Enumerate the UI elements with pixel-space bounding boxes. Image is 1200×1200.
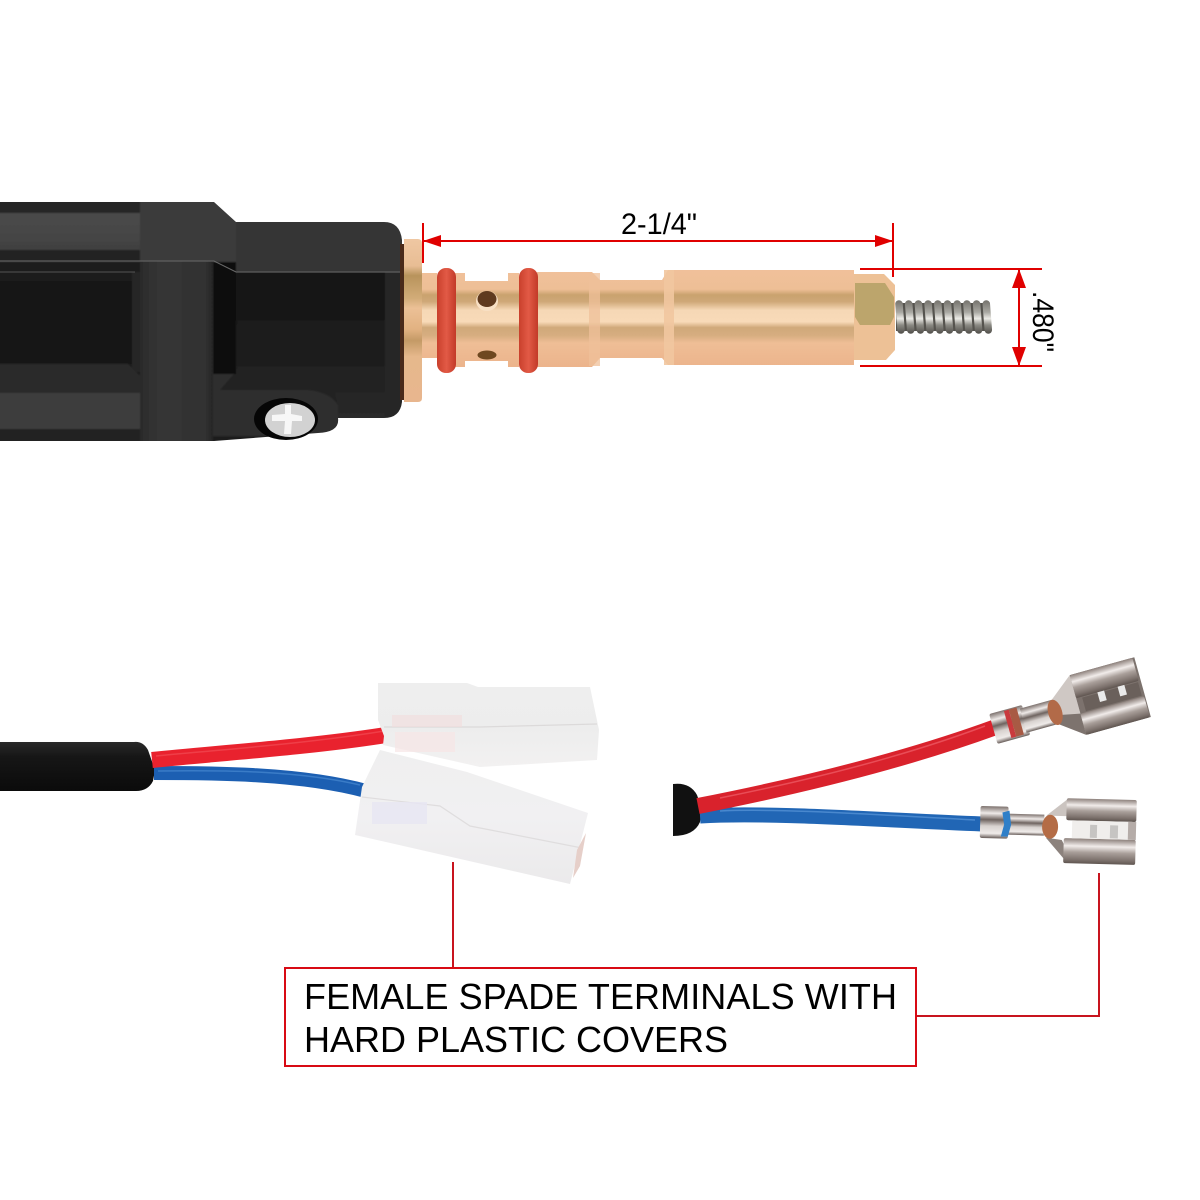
steel spring	[896, 303, 990, 331]
callout: female spade terminals label	[285, 968, 916, 1066]
callout: female spade terminals label: FEMALE SPADE TERMINALS WITH	[304, 976, 897, 1017]
callout: leader lines	[453, 862, 1099, 1016]
panel: wires with plastic-covered terminals	[0, 657, 1151, 884]
red o-ring right	[519, 268, 538, 373]
plastic cover lower	[355, 750, 588, 884]
brass contact tip body	[422, 270, 854, 367]
brass hex nut	[854, 274, 895, 360]
blue wire	[154, 771, 366, 791]
black sleeve end	[673, 784, 701, 836]
red o-ring left	[437, 268, 456, 373]
spade terminal upper	[985, 657, 1151, 758]
red wire right	[698, 726, 996, 806]
hole upper	[476, 291, 498, 311]
dimension: diameter .480 inch	[860, 269, 1059, 366]
black connector handle	[0, 198, 415, 448]
spade terminal lower	[979, 796, 1137, 865]
dimension: diameter .480 inch: .480"	[1026, 291, 1059, 352]
red wire	[152, 731, 386, 760]
plastic cover upper	[378, 683, 599, 767]
hole lower	[478, 350, 496, 360]
brass flange	[404, 239, 422, 402]
flange shadow edge	[400, 244, 404, 400]
callout: female spade terminals label: HARD PLASTIC COVERS	[304, 1019, 728, 1060]
black heat-shrink sleeve	[0, 742, 155, 791]
dimension: length 2-1/4 inch	[423, 208, 893, 277]
dimension: length 2-1/4 inch: 2-1/4"	[621, 208, 697, 241]
blue wire right	[700, 810, 982, 824]
screw	[254, 398, 318, 440]
panel: MIG torch connector photo	[0, 198, 990, 448]
